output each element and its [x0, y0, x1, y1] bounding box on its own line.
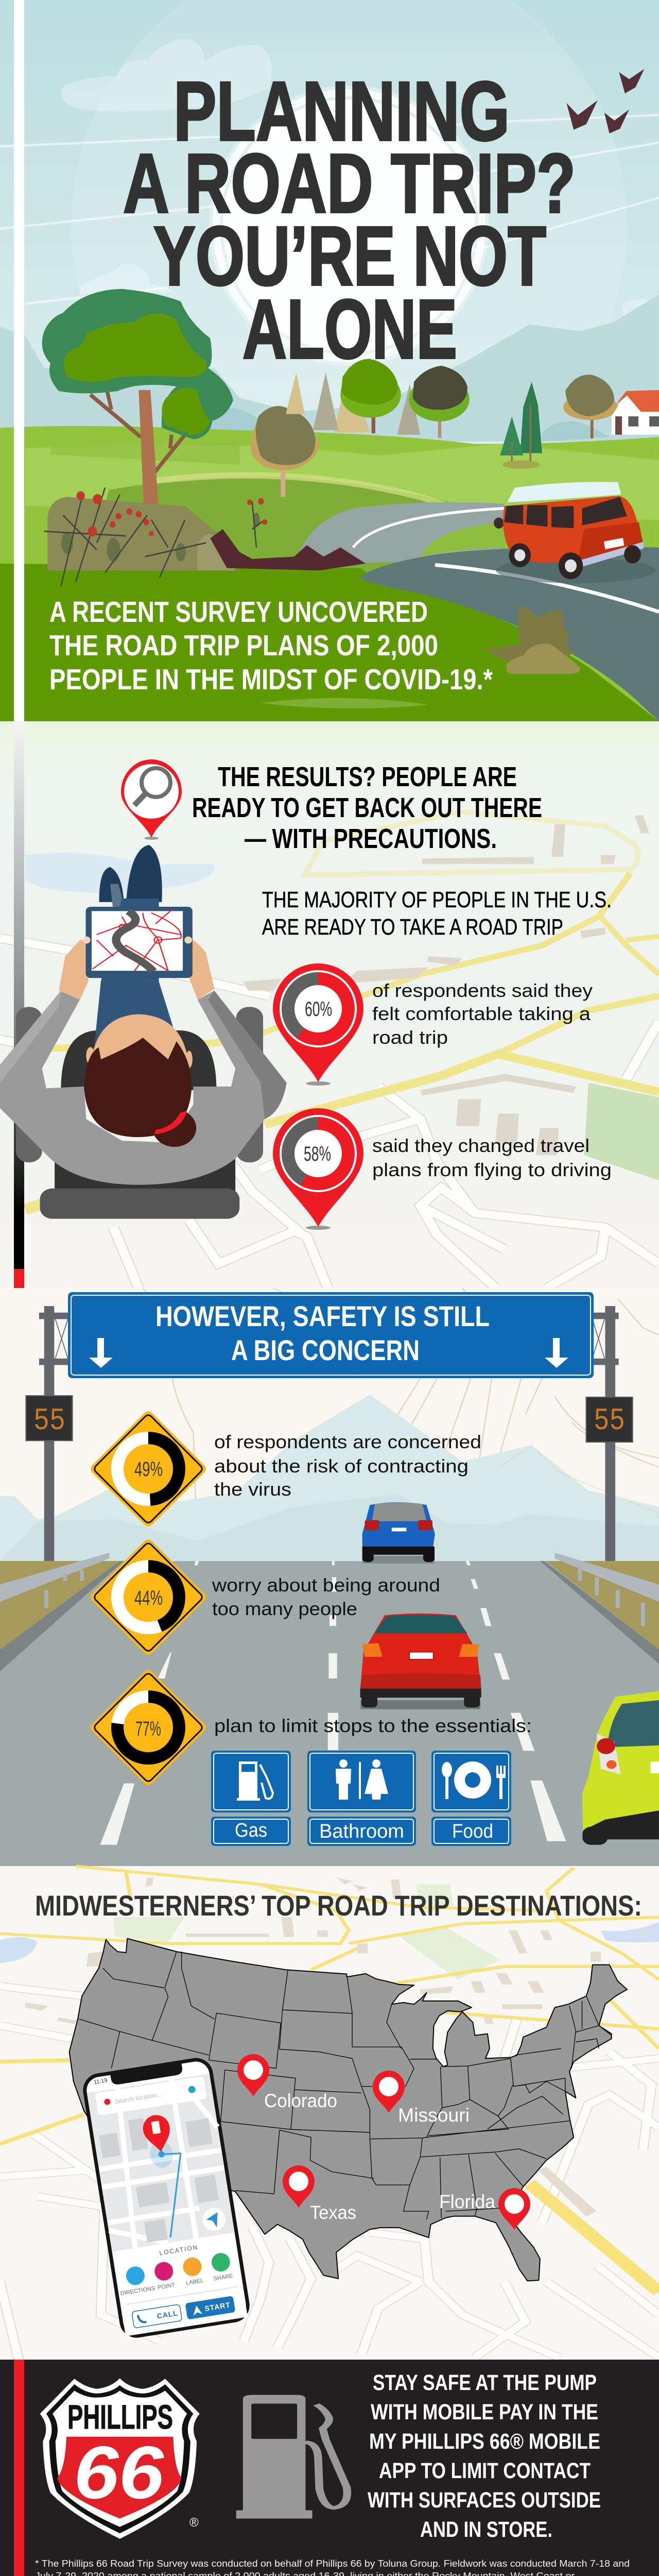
stat text: 77%: plan to limit stops to the essentials:: [214, 1715, 532, 1736]
stat text: 44%: worry about being around: [212, 1574, 440, 1596]
hero subtitle: THE ROAD TRIP PLANS OF 2,000: [49, 629, 438, 662]
road sign: 49%: [89, 1409, 208, 1529]
service sign: gas: [211, 1751, 291, 1846]
road sign: 44%: [89, 1537, 208, 1657]
callout: stay safe at the pump: MY PHILLIPS 66® MOBILE: [369, 2429, 600, 2454]
map pin: Missouri: [373, 2071, 470, 2126]
foreground grass: [0, 564, 659, 721]
stat pin: 60%: [273, 963, 363, 1086]
highway sign: however safety: HOWEVER, SAFETY IS STILL: [155, 1300, 490, 1332]
icon: woman: [365, 1759, 388, 1800]
road front section: [359, 547, 659, 721]
road back section: [298, 502, 505, 564]
bottom panel: START: [204, 2300, 231, 2313]
heading: the results: THE RESULTS? PEOPLE ARE: [218, 761, 517, 792]
bottom panel: LABEL: [185, 2278, 204, 2286]
stat pin: 60%: 60%: [305, 998, 332, 1021]
road sign: 49%: 49%: [134, 1458, 163, 1481]
map pin: Texas: [283, 2165, 356, 2223]
clouds: [61, 39, 659, 414]
red van: [494, 482, 655, 583]
stat text: 44%: too many people: [212, 1598, 357, 1619]
stat text: 60%: road trip: [372, 1027, 448, 1048]
callout: stay safe at the pump: [368, 2370, 601, 2542]
armrests: [16, 1007, 263, 1162]
faint map roads: [143, 1288, 659, 1559]
logo: Phillips 66 shield: [40, 2378, 200, 2539]
title: PLANNING: [174, 64, 510, 158]
subheading: majority ready: [262, 887, 612, 940]
stat text: 49%: [214, 1431, 481, 1500]
service sign: bathroom: Bathroom: [319, 1821, 404, 1842]
map pin: Colorado: Colorado: [264, 2090, 337, 2111]
hero subtitle: A RECENT SURVEY UNCOVERED: [49, 596, 428, 629]
stat pin: 58%: 58%: [304, 1143, 331, 1165]
callout: stay safe at the pump: APP TO LIMIT CONTACT: [379, 2459, 591, 2483]
tablet with red route map: [86, 907, 193, 978]
map pin: Missouri: Missouri: [398, 2105, 470, 2126]
birds: [566, 69, 644, 133]
thumbs: [83, 937, 192, 944]
phone map: [87, 2074, 234, 2252]
callout: stay safe at the pump: WITH MOBILE PAY IN THE: [371, 2400, 598, 2425]
phone with navigation app: [82, 2058, 250, 2338]
US map: [70, 1939, 627, 2281]
hero subtitle: PEOPLE IN THE MIDST OF COVID-19.*: [49, 663, 493, 696]
dark tree: [409, 366, 470, 438]
stat text: 58%: plans from flying to driving: [372, 1159, 612, 1180]
road sign: 44%: 44%: [134, 1587, 163, 1609]
logo: Phillips 66 shield: PHILLIPS: [67, 2398, 173, 2436]
nav arrow: [201, 2207, 227, 2232]
service sign: food: Food: [452, 1821, 493, 1842]
stat text: 49%: of respondents are concerned: [214, 1431, 481, 1452]
bottom panel: POINT: [157, 2282, 176, 2291]
map pin: Florida: [439, 2188, 530, 2230]
panel: destinations map background: [0, 1866, 659, 2370]
bottom panel: SHARE: [213, 2273, 233, 2282]
cypress trees: [286, 366, 420, 435]
search bar: Search location...: [114, 2091, 162, 2105]
seat: [40, 1030, 239, 1219]
heading: the results: READY TO GET BACK OUT THERE: [192, 792, 542, 823]
right bush: [485, 605, 580, 674]
route: [158, 2151, 194, 2238]
front-left shrubs: [44, 487, 366, 586]
speed sign left: 55: [33, 1404, 65, 1439]
panel: highway scene: [0, 1288, 659, 1866]
panel: hero landscape: [0, 0, 659, 721]
icon: man: [336, 1759, 351, 1800]
arrow left: [89, 1338, 113, 1368]
service sign: gas: Gas: [235, 1820, 267, 1841]
road sign: 77%: 77%: [135, 1718, 161, 1740]
logo: Phillips 66 shield: ®: [189, 2516, 199, 2530]
back grass: [0, 426, 659, 721]
hero scenery: [0, 39, 659, 721]
stat text: 58%: said they changed travel: [372, 1135, 589, 1156]
bottom panel: [112, 2232, 248, 2336]
stat text: 58%: [372, 1135, 612, 1180]
green car: [582, 1691, 659, 1845]
sweater: [0, 991, 287, 1185]
pine trees: [521, 382, 542, 453]
mid olive tree: [241, 406, 319, 505]
service sign: food: [431, 1751, 511, 1846]
hands: [59, 938, 214, 999]
blue car: [362, 1502, 435, 1564]
footnote: [35, 2558, 630, 2576]
hero subtitle: [49, 596, 493, 696]
speed sign right: 55: [594, 1404, 625, 1439]
illustration: driver with tablet seen from above: [0, 845, 287, 1219]
subheading: majority ready: ARE READY TO TAKE A ROAD TRIP: [262, 914, 563, 940]
road sign: 77%: [89, 1668, 208, 1787]
house: [612, 390, 659, 435]
stat text: 44%: [212, 1574, 440, 1619]
red car: [360, 1614, 481, 1709]
stripe: white to black to red: [14, 0, 24, 2576]
icon: pump: [237, 1761, 273, 1801]
bottom panel: CALL: [156, 2309, 179, 2320]
stat pin: 58%: [273, 1108, 363, 1230]
highway sign posts: [39, 1306, 619, 1561]
heading: the results: — WITH PRECAUTIONS.: [245, 823, 497, 854]
midground meadow: [84, 477, 505, 580]
state borders: [79, 1952, 612, 2219]
mountains: [0, 294, 659, 442]
map pin: Colorado: [237, 2054, 337, 2111]
phone with navigation app: 11:19: [93, 2077, 108, 2086]
top notch: [110, 2062, 183, 2086]
callout: stay safe at the pump: STAY SAFE AT THE PUMP: [373, 2370, 597, 2395]
logo: Phillips 66 shield: 66: [74, 2431, 164, 2514]
callout: stay safe at the pump: AND IN STORE.: [420, 2517, 552, 2542]
stat text: 60%: [372, 980, 593, 1048]
heading: the results: [192, 761, 542, 854]
right olive tree: [563, 375, 618, 438]
stat text: 60%: felt comfortable taking a: [372, 1003, 591, 1024]
sun rings: [71, 0, 627, 504]
icon: gas pump: [236, 2395, 347, 2519]
sky streaks: [0, 115, 659, 303]
panel: dark footer: [0, 2360, 659, 2576]
bottom panel: DIRECTIONS: [120, 2285, 155, 2297]
highway sign: however safety: A BIG CONCERN: [231, 1334, 420, 1366]
footnote: * The Phillips 66 Road Trip Survey was conducted on behalf of Phillips 66 by Toluna Group. Fieldwork was conducted March 7-18 and: [35, 2558, 630, 2569]
icon: plate and cutlery: [442, 1761, 506, 1799]
callout: stay safe at the pump: WITH SURFACES OUTSIDE: [368, 2488, 601, 2513]
speed displays: [26, 1396, 633, 1442]
title: ALONE: [242, 282, 457, 376]
stat text: 60%: of respondents said they: [372, 980, 593, 1001]
stat text: 49%: about the risk of contracting: [214, 1455, 469, 1477]
arrow right: [545, 1338, 568, 1368]
stat text: 49%: the virus: [214, 1479, 291, 1500]
lane dashes: [100, 1561, 566, 1845]
icon: magnifier pin: [121, 759, 182, 840]
guard rails: [0, 1553, 659, 1626]
roadside ground and shoulders: [0, 1561, 659, 1671]
legs: [93, 845, 185, 1065]
mountains: [0, 1395, 659, 1561]
map pin: Florida: Florida: [439, 2191, 495, 2212]
head and hair: [84, 1014, 196, 1147]
title: [123, 64, 576, 376]
green tree: [340, 359, 401, 433]
panel: results map background: [0, 721, 659, 1288]
search bar: [95, 2076, 207, 2116]
big tree: [42, 289, 233, 536]
phone pin: [141, 2113, 174, 2154]
highway sign: however safety: [68, 1292, 594, 1378]
bottom panel: LOCATION: [159, 2244, 199, 2257]
map pin: Texas: Texas: [310, 2202, 356, 2223]
service sign: bathroom: [307, 1751, 416, 1846]
